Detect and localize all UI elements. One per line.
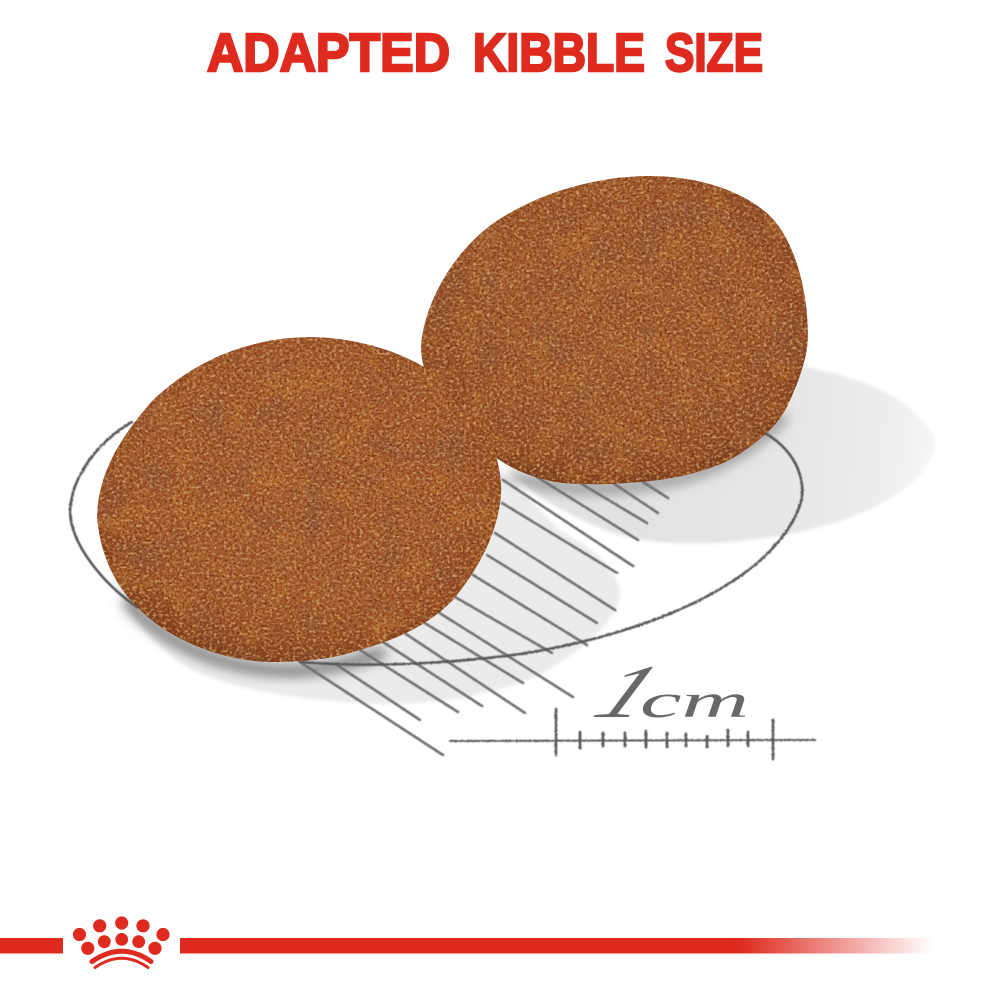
shadow: right kibble xyxy=(520,367,935,543)
scale label: 1cm: cm xyxy=(640,675,749,728)
right kibble xyxy=(421,176,808,484)
title: SIZE xyxy=(665,23,763,83)
pencil circle outline xyxy=(70,422,802,665)
shadow: left kibble xyxy=(112,470,620,704)
bottom rule: right segment xyxy=(180,938,932,954)
left kibble xyxy=(97,337,501,662)
title: KIBBLE xyxy=(473,23,645,83)
bottom rule: left segment xyxy=(0,938,63,954)
scale label: 1cm xyxy=(581,650,749,734)
scale label: 1cm: 1 xyxy=(581,650,674,734)
contact shadow: left kibble xyxy=(125,600,385,671)
icon: royal crown logo xyxy=(73,916,170,968)
scale ruler xyxy=(450,709,815,759)
title: ADAPTED xyxy=(207,23,450,83)
contact shadow: right kibble xyxy=(510,415,785,489)
pencil hatching xyxy=(300,477,668,755)
